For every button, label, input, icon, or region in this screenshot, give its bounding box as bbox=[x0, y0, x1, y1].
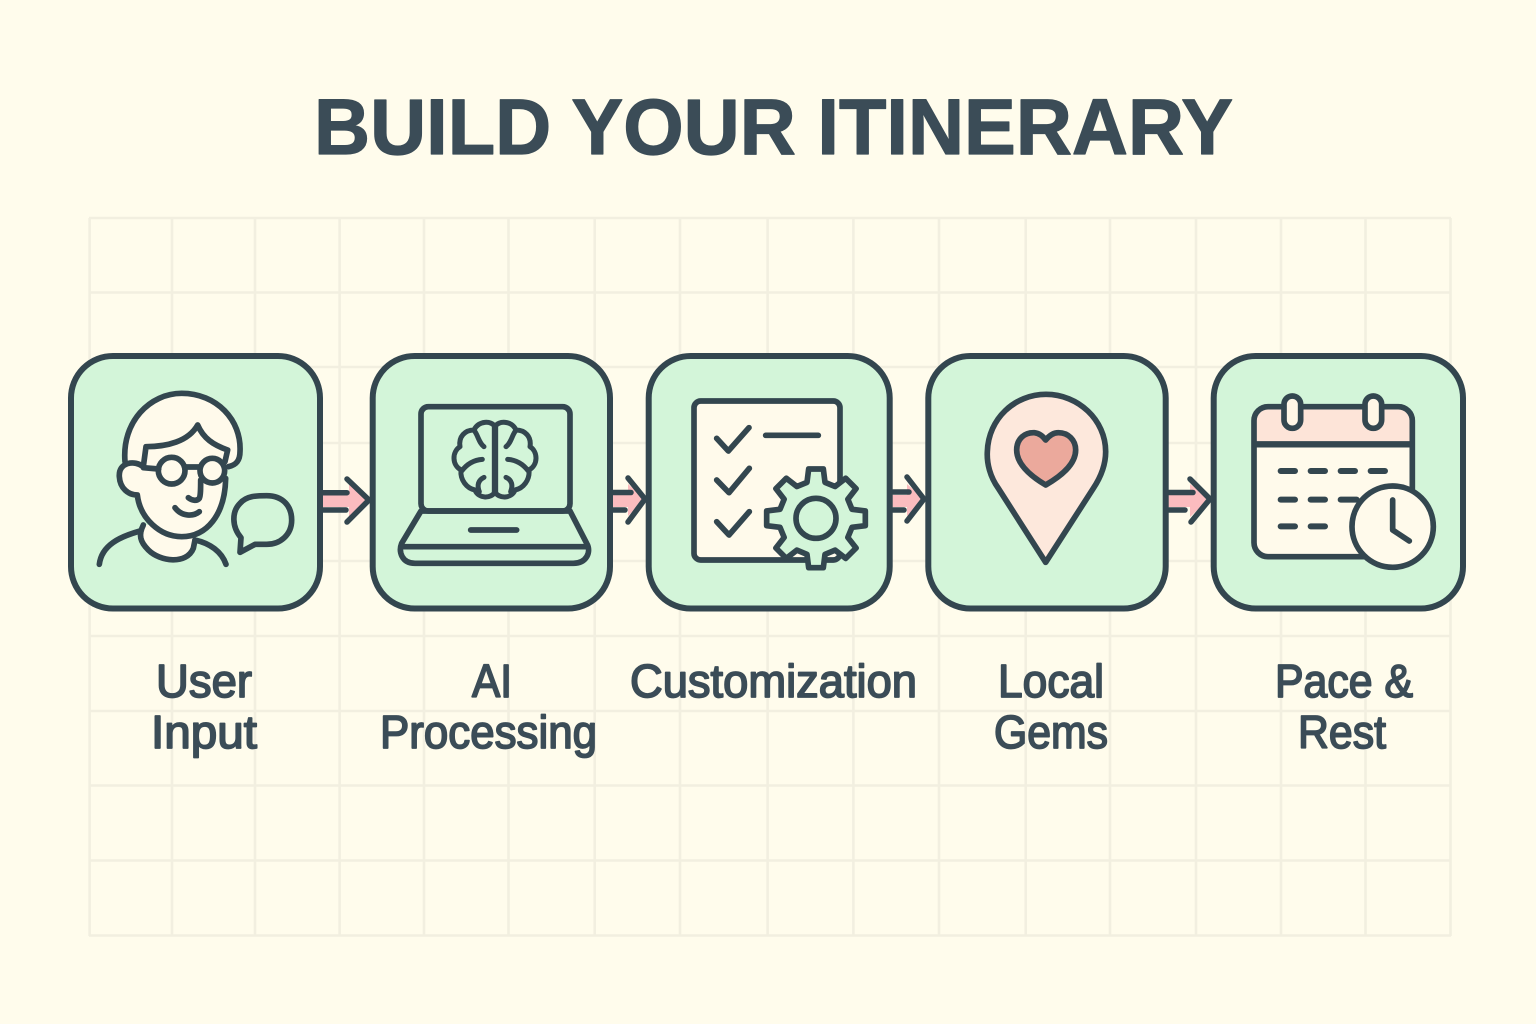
icon: gear bbox=[767, 469, 865, 568]
icon: calendar with clock bbox=[1254, 396, 1433, 567]
icon: brain bbox=[454, 422, 536, 497]
label: Pace & Rest bbox=[1275, 655, 1413, 758]
icon: map pin with heart bbox=[987, 394, 1106, 562]
panel: local gems bbox=[928, 356, 1166, 608]
title: BUILD YOUR ITINERARY bbox=[314, 82, 1233, 171]
label: AI Processing bbox=[380, 655, 597, 758]
label: Pace & Rest: Rest bbox=[1298, 706, 1386, 758]
label: User Input bbox=[151, 655, 257, 758]
arrow: user input to AI processing bbox=[322, 479, 369, 522]
icon: clock bbox=[1352, 486, 1433, 567]
label: AI Processing: Processing bbox=[380, 706, 597, 758]
label: User Input: Input bbox=[151, 706, 257, 758]
icon: checklist with gear bbox=[694, 401, 865, 568]
label: Local Gems bbox=[994, 655, 1108, 758]
panel: pace and rest bbox=[1214, 356, 1463, 608]
arrow: local gems to pace and rest bbox=[1168, 479, 1210, 522]
label: Local Gems: Local bbox=[998, 655, 1104, 707]
label: Customization: Customization bbox=[630, 655, 917, 707]
label: User Input: User bbox=[156, 655, 252, 707]
label: Pace & Rest: Pace & bbox=[1275, 655, 1413, 707]
icon: speech bubble bbox=[234, 496, 292, 552]
panel: AI processing bbox=[373, 356, 610, 608]
panel: customization bbox=[649, 356, 890, 608]
label: AI Processing: AI bbox=[472, 655, 512, 707]
arrow: AI processing to customization bbox=[612, 478, 645, 522]
icon: person with glasses and speech bubble bbox=[99, 393, 292, 564]
panel: user input bbox=[71, 356, 320, 608]
icon: laptop with brain bbox=[400, 407, 589, 563]
arrow: customization to local gems bbox=[892, 477, 924, 521]
label: Local Gems: Gems bbox=[994, 706, 1108, 758]
